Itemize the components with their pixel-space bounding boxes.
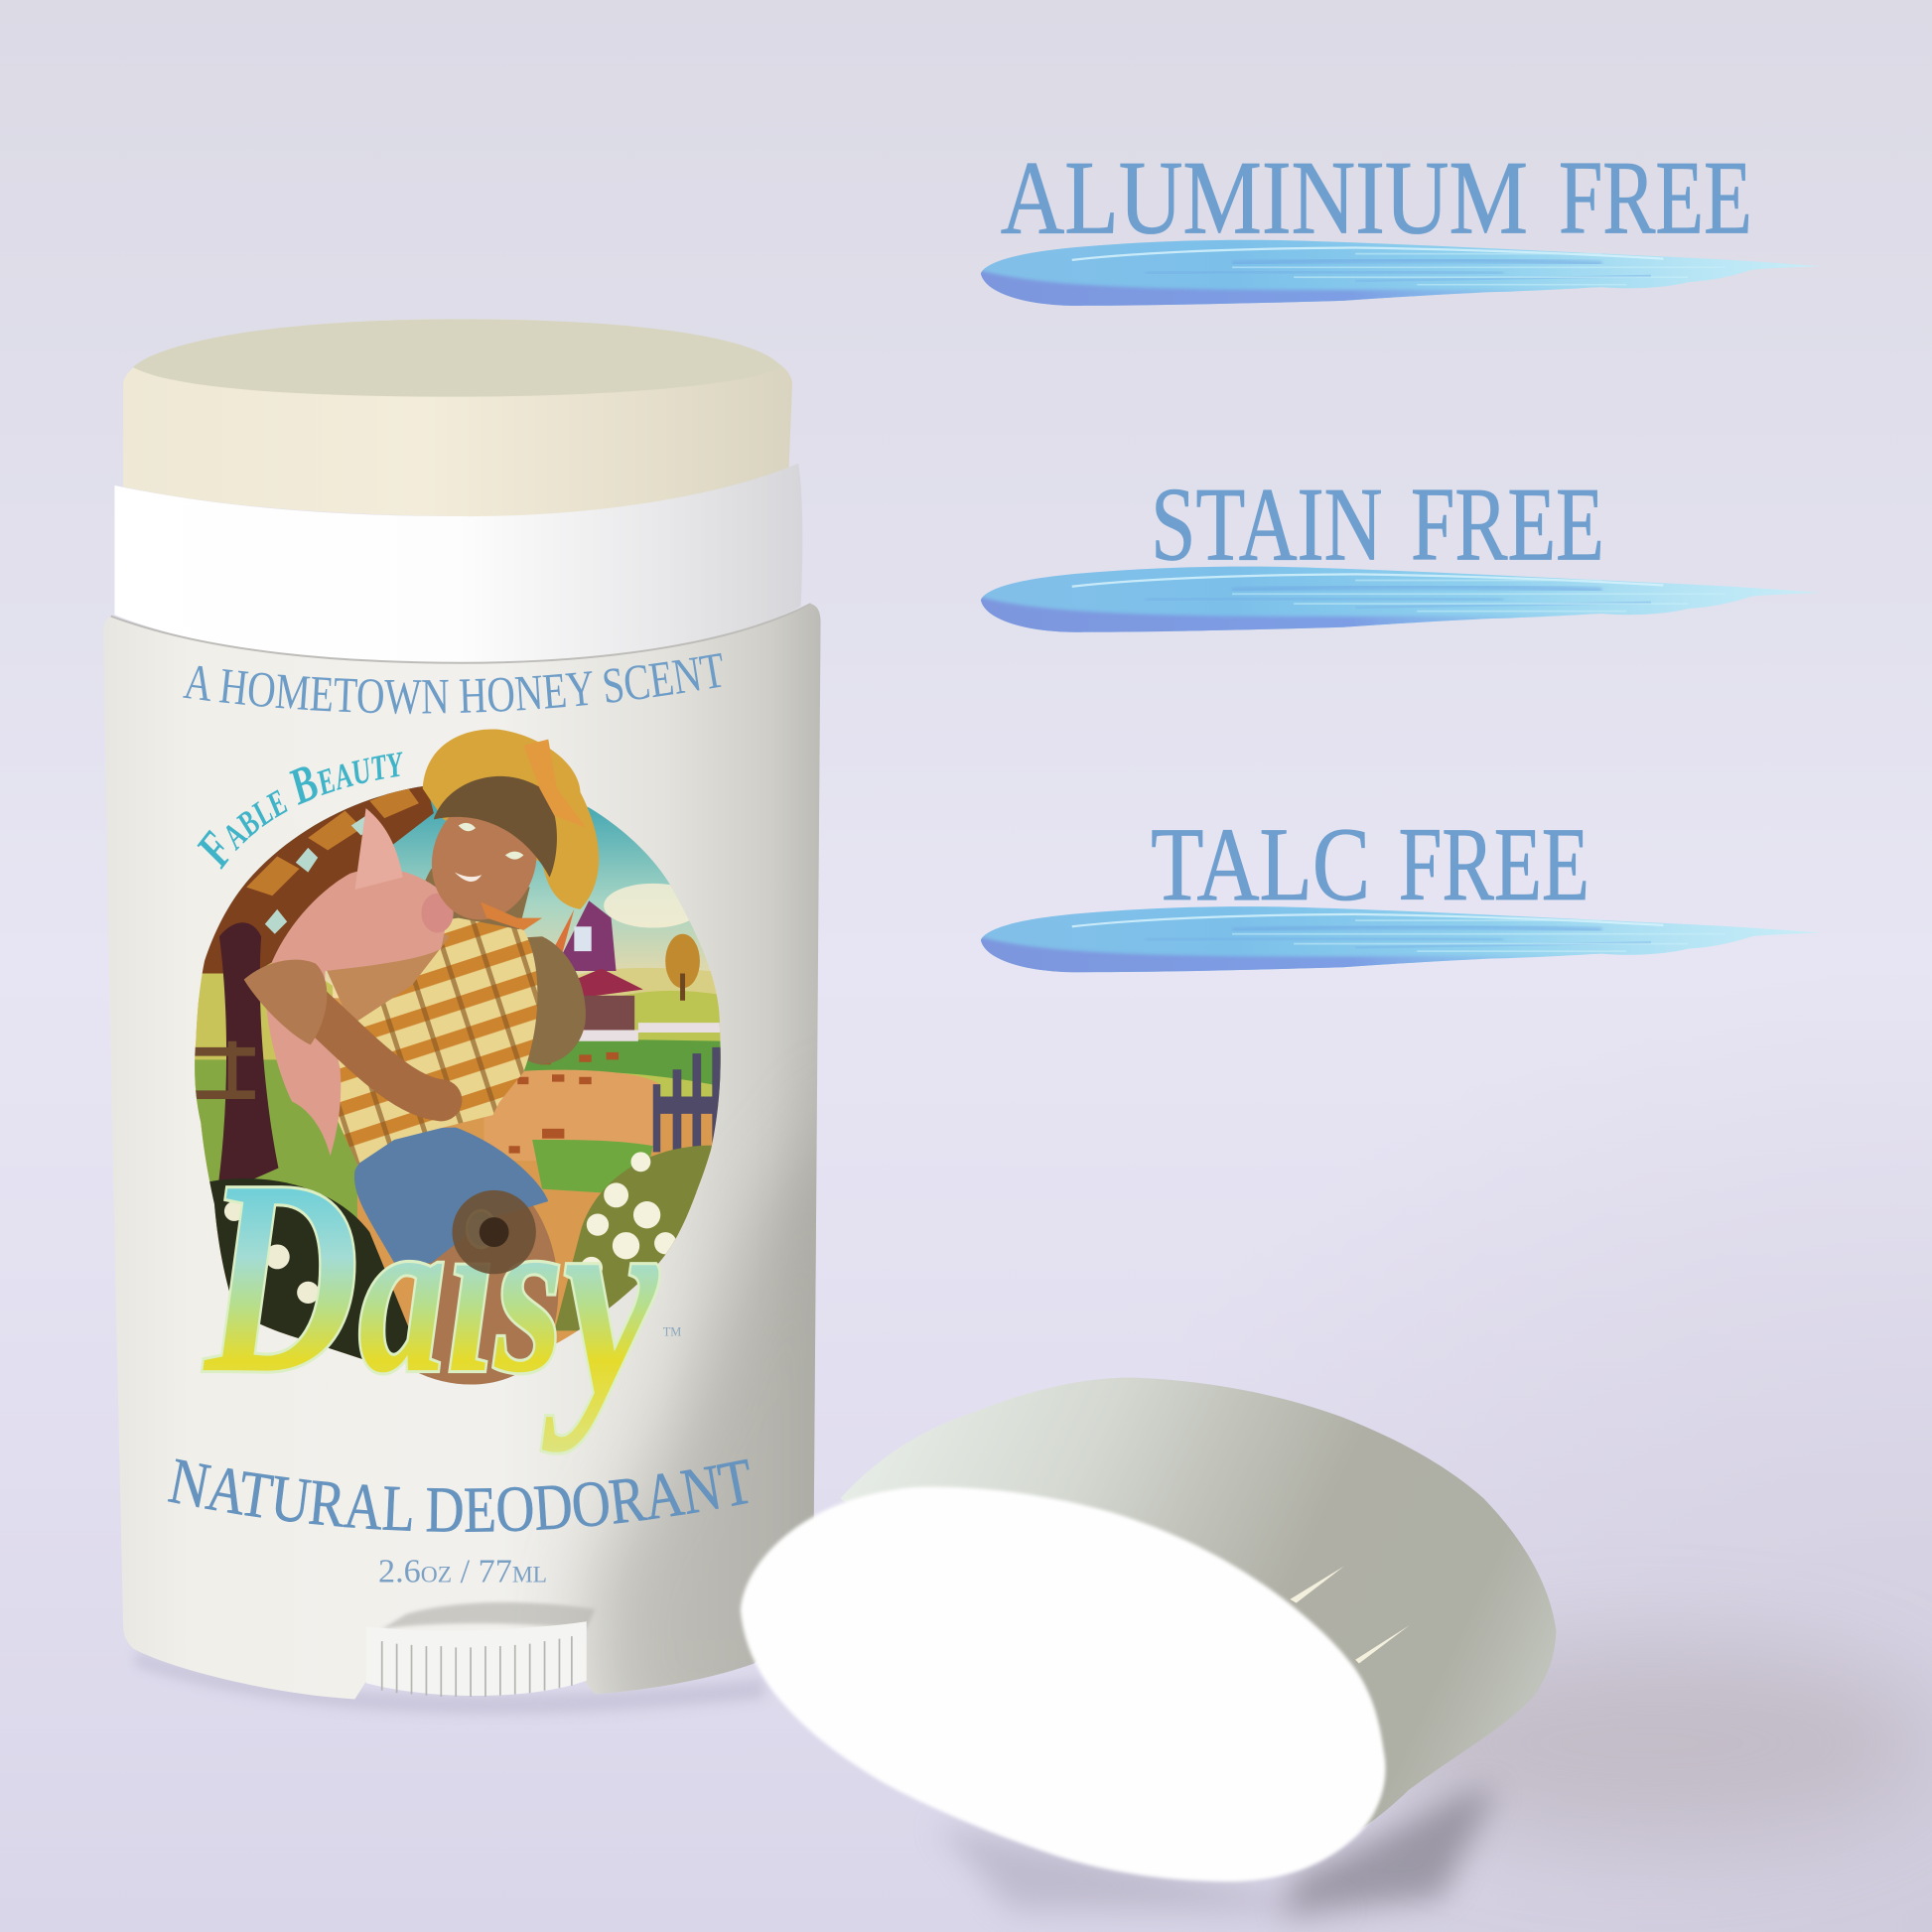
brush stroke 3	[973, 906, 1821, 987]
pig ear	[354, 808, 403, 890]
deodorant stick	[103, 320, 820, 1700]
pig	[265, 869, 451, 1156]
face	[418, 786, 550, 931]
label: product name: NATURAL DEODORANT	[167, 1458, 750, 1532]
headline: aluminium free: FREE	[1559, 140, 1752, 256]
label: scent line: A HOMETOWN HONEY SCENT	[183, 653, 723, 715]
trademark: TM	[663, 1324, 681, 1338]
illustration: farm girl with pig	[195, 729, 721, 1455]
headline: stain free	[1151, 466, 1604, 582]
ground shadows	[136, 1645, 1932, 1916]
hair front	[434, 776, 557, 878]
dial wheel	[366, 1602, 595, 1697]
brush stroke 1	[973, 240, 1821, 321]
hair	[421, 869, 586, 1064]
pig snout	[421, 894, 454, 932]
mouth	[455, 873, 482, 882]
brand: fable beauty: Fable Beauty	[197, 752, 403, 870]
outer body	[103, 604, 863, 1749]
chickens	[507, 1052, 619, 1154]
girl	[244, 729, 599, 1385]
flower bush	[554, 1146, 727, 1330]
white inner sleeve	[114, 464, 802, 663]
chest	[326, 924, 450, 1026]
bow	[523, 740, 587, 828]
left meadow	[185, 1059, 357, 1232]
gate	[653, 1047, 722, 1171]
canopy	[191, 778, 434, 973]
trunk	[216, 922, 278, 1195]
arm	[306, 1001, 441, 1100]
sunflower tattoo	[452, 1190, 536, 1274]
cap face	[741, 1487, 1386, 1881]
logo: daisy: y	[540, 1146, 660, 1452]
eyes	[459, 823, 523, 860]
hat	[423, 729, 599, 909]
removed cap	[741, 1378, 1556, 1881]
cream deodorant top	[123, 319, 792, 516]
brush stroke 2	[973, 567, 1821, 647]
label: size: 2.6oz / 77ml	[378, 1554, 547, 1590]
logo: daisy: Dais	[205, 1124, 624, 1431]
headline: stain free: STAIN	[1151, 466, 1382, 582]
barn	[547, 900, 722, 1041]
farm scene	[185, 776, 740, 1380]
headline: talc free: TALC	[1151, 806, 1370, 922]
headline: aluminium free: ALUMINIUM	[1001, 140, 1528, 256]
headline: talc free: FREE	[1399, 806, 1589, 922]
headline: stain free: FREE	[1411, 466, 1604, 582]
headline: talc free	[1151, 806, 1589, 922]
shorts	[354, 1128, 548, 1263]
dark grass	[204, 1178, 425, 1368]
shirt	[336, 918, 537, 1165]
cap highlights	[1290, 1566, 1410, 1663]
neck bow	[481, 901, 542, 930]
thigh	[413, 1201, 558, 1385]
hand	[244, 960, 327, 1044]
cap shell	[840, 1378, 1556, 1866]
